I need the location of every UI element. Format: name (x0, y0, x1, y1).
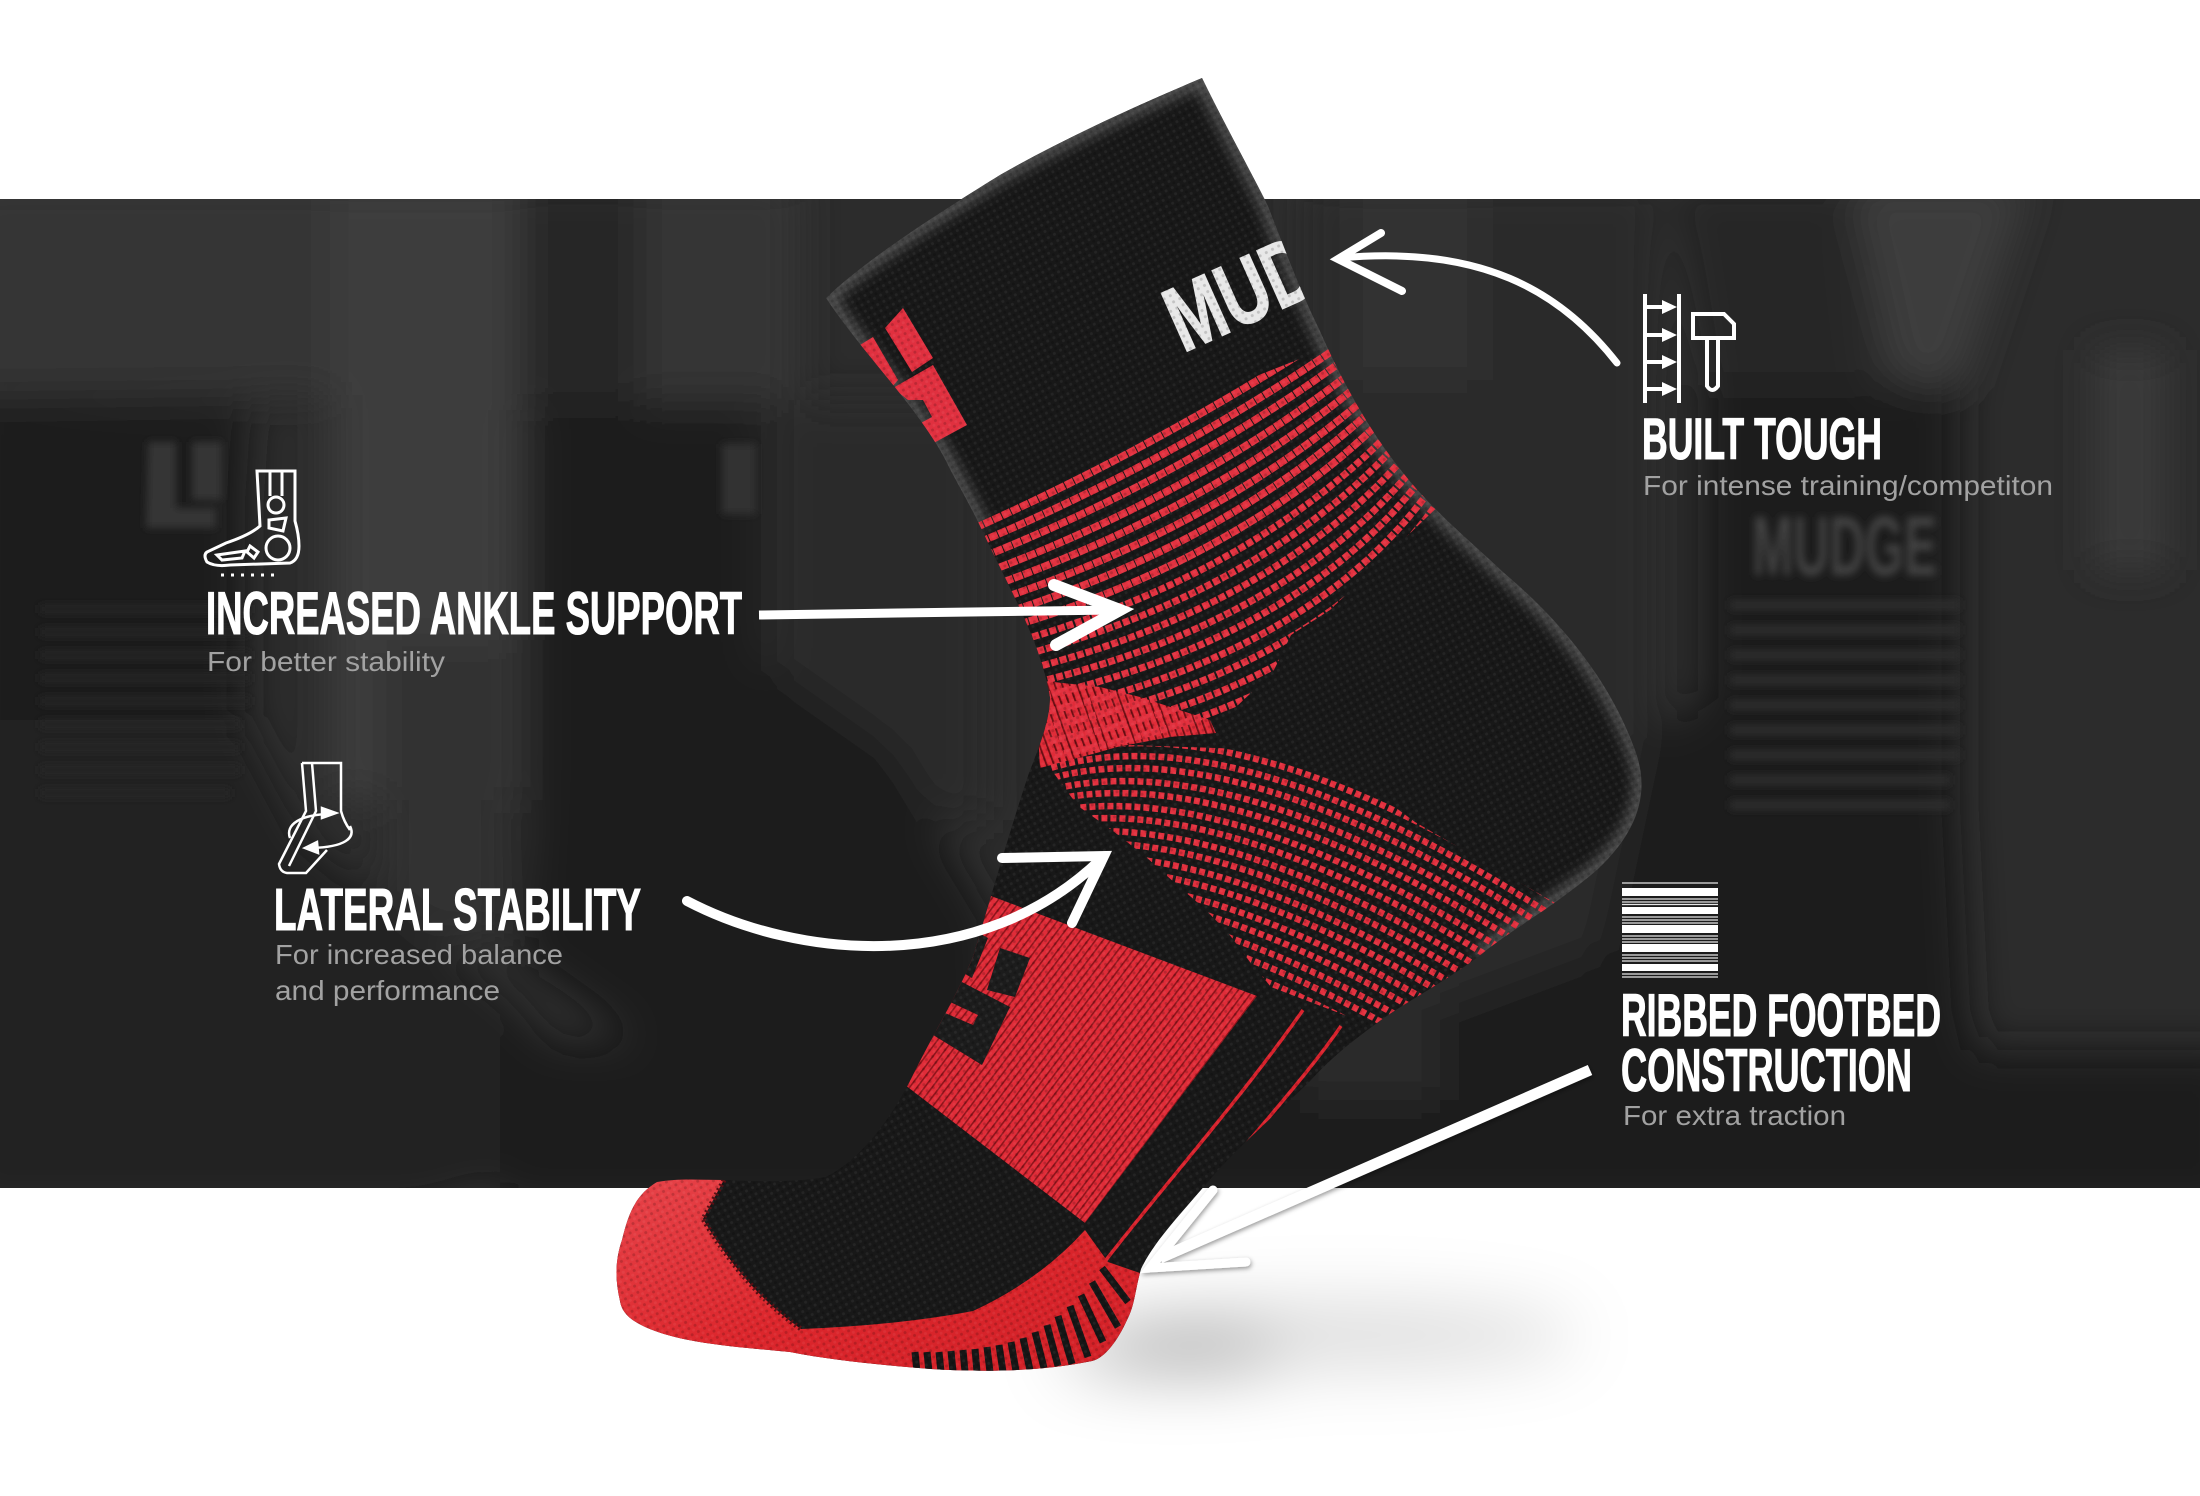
sock MUDGE wordmark: MUDGE (1150, 176, 1420, 371)
sock ankle support stripes (975, 335, 1453, 755)
icon: foot skeleton (205, 471, 299, 575)
callout: lateral stability (274, 763, 641, 1006)
background photo banner: MUDGE (1752, 499, 1937, 593)
callout: built tough (1642, 294, 2053, 501)
sock red ribbed arch panel (905, 890, 1257, 1223)
sock toe seam (703, 1180, 801, 1329)
sock thin red lines (1106, 1010, 1341, 1274)
sock red logo on cuff (860, 308, 967, 445)
callout: ribbed footbed construction (1621, 883, 1941, 1131)
arrow: ankle support (759, 585, 1120, 645)
heading: increased ankle support: INCREASED ANKLE SUPPORT (206, 580, 742, 647)
heading: lateral stability: LATERAL STABILITY (274, 877, 641, 943)
sock red toe and sole (600, 1160, 1160, 1400)
heading: ribbed footbed construction: RIBBED FOOTBED (1621, 982, 1941, 1049)
icon: wall and hammer (1645, 294, 1734, 403)
icon: ribbed texture (1622, 883, 1718, 977)
background photo banner (0, 180, 2200, 1210)
text: for extra traction: For extra traction (1623, 1100, 1846, 1131)
text: for better stability: For better stability (207, 646, 445, 677)
sock lateral stability stripes (1050, 745, 1555, 1024)
sock black sole ribs (915, 1268, 1128, 1372)
heading: ribbed footbed construction (1621, 982, 1941, 1104)
sock solid red ankle wedge (1035, 680, 1216, 768)
sock ground shadow (1060, 1303, 1580, 1370)
arrow: lateral stability (687, 856, 1104, 946)
sock fabric knit texture (590, 60, 1660, 1380)
text: for intense training: For intense training/competiton (1643, 470, 2053, 501)
sock illustration (590, 60, 1660, 1400)
heading: built tough: BUILT TOUGH (1642, 407, 1882, 472)
heading: ribbed footbed construction: CONSTRUCTION (1621, 1037, 1912, 1104)
arrow: built tough (1338, 233, 1617, 363)
sock black logo on arch (925, 932, 1030, 1065)
arrow: ribbed footbed (1150, 1070, 1590, 1268)
text: for increased balance and performance: and performance (275, 975, 500, 1006)
icon: tilted ankle (279, 763, 352, 873)
text: for increased balance and performance (275, 939, 563, 1006)
text: for increased balance and performance: For increased balance (275, 939, 563, 970)
sock edge highlight (826, 78, 1642, 957)
callout: increased ankle support (205, 471, 742, 677)
